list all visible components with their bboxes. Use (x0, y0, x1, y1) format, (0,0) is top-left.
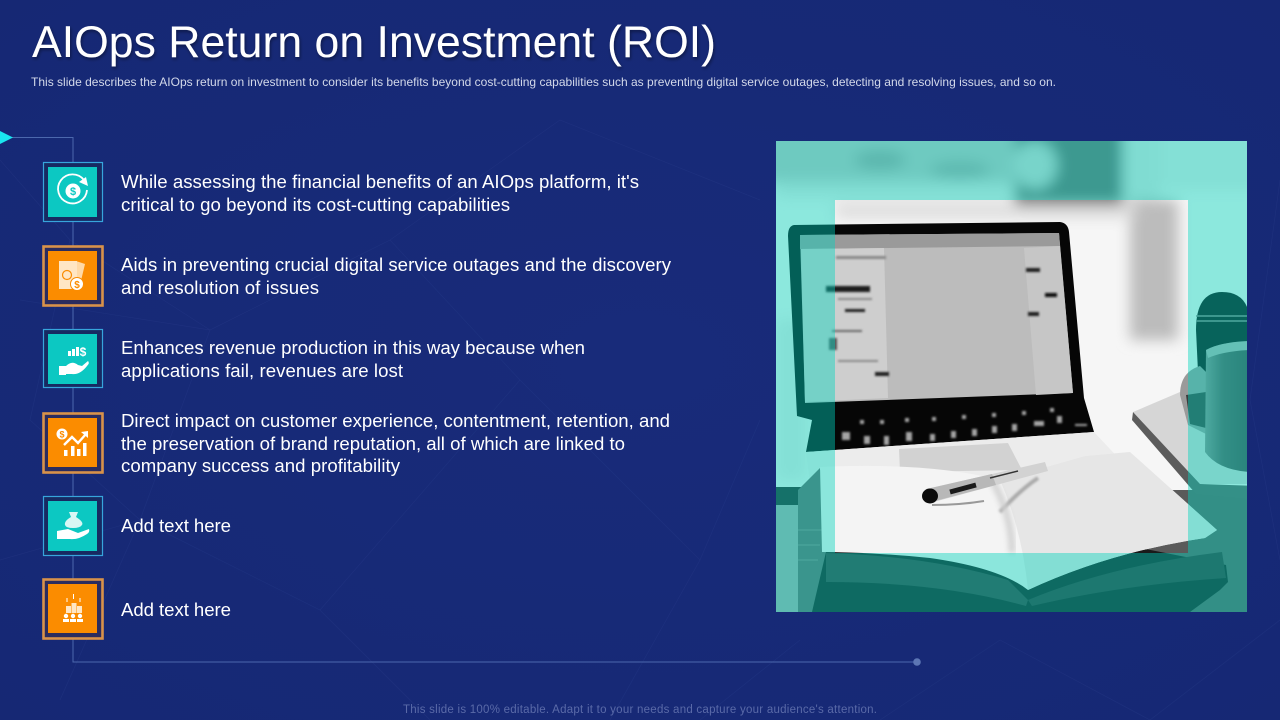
icon: profit trend: $ (59, 430, 65, 440)
text block 4: Direct impact on customer experience, contentment, retention, and (121, 410, 670, 431)
text block 2 (121, 254, 672, 298)
text block 6: Add text here (121, 599, 231, 620)
timeline connector (0, 131, 921, 666)
text block 4: company success and profitability (121, 455, 401, 476)
icon: hand with growth bars (44, 330, 102, 388)
icon: profit trend (44, 414, 102, 472)
text block 1: critical to go beyond its cost-cutting capabilities (121, 194, 510, 215)
icon: cash and coin (44, 246, 102, 306)
arrow: timeline start (0, 131, 13, 144)
text block 3 (121, 337, 585, 381)
title: AIOps Return on Investment (ROI) (32, 18, 716, 67)
text block 3: applications fail, revenues are lost (121, 360, 404, 381)
text block 4 (121, 410, 670, 476)
text block 3: Enhances revenue production in this way because when (121, 337, 585, 358)
icon: group and growth (44, 580, 102, 638)
subtitle: This slide describes the AIOps return on investment to consider its benefits beyond cost-cutting capabilities such as preventing digital service outages, detecting and resolving issues, and so on. (31, 75, 1056, 89)
icon: dollar cycle: $ (70, 186, 76, 198)
timeline end dot (913, 658, 921, 666)
icon: hand with growth bars: $ (80, 345, 87, 359)
text block 1 (121, 171, 639, 215)
text block 2: and resolution of issues (121, 277, 319, 298)
text block 5: Add text here (121, 515, 231, 536)
text block 4: the preservation of brand reputation, all of which are linked to (121, 433, 625, 454)
icon: cash and coin: $ (74, 280, 80, 291)
text block 1: While assessing the financial benefits of an AIOps platform, it's (121, 171, 639, 192)
icon: hand with money bag (44, 496, 102, 556)
photo: laptop and notebook (776, 141, 1247, 612)
icon: dollar cycle (44, 162, 102, 222)
text block 2: Aids in preventing crucial digital service outages and the discovery (121, 254, 672, 275)
footer note: This slide is 100% editable. Adapt it to your needs and capture your audience's attention. (403, 704, 877, 716)
